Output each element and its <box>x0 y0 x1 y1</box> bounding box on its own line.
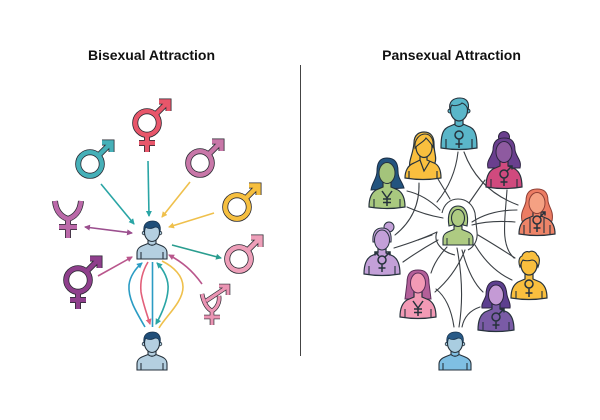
person: centre green figure <box>443 206 473 245</box>
icon: teal male symbol <box>78 142 112 176</box>
person: lilac figure <box>364 222 400 276</box>
icon: purple transgender symbol <box>66 258 100 309</box>
person: green figure with dark blue hair <box>369 158 405 208</box>
panel: pansexual attraction diagram <box>364 98 555 370</box>
centre figure halo <box>436 199 477 255</box>
person: bottom figure <box>137 332 167 370</box>
person: teal top figure <box>441 98 477 150</box>
person: magenta figure with purple hair <box>486 132 522 188</box>
person: pink figure with long hair <box>400 270 436 318</box>
person: yellow curly-haired figure <box>511 251 547 300</box>
icon: pink male symbol <box>227 238 260 271</box>
icon: mauve male symbol <box>188 142 222 175</box>
connection lines <box>394 152 518 327</box>
arrows: symbols to person <box>85 161 221 284</box>
person: coral figure <box>519 189 555 236</box>
person: yellow long-haired figure <box>405 132 441 180</box>
divider between panels <box>300 65 302 356</box>
icon: pink forked arrow symbol <box>202 286 228 325</box>
icon: yellow male symbol <box>225 186 258 219</box>
title: Pansexual Attraction: Pansexual Attraction <box>382 47 521 63</box>
panel: bisexual attraction diagram <box>55 102 260 370</box>
arrows: between the two people <box>129 261 183 328</box>
icon: red transgender symbol <box>135 102 168 152</box>
person: purple figure <box>478 281 514 332</box>
title: Bisexual Attraction: Bisexual Attraction <box>88 47 215 63</box>
person: centre figure <box>137 221 167 259</box>
person: blue bottom figure <box>439 332 471 370</box>
icon: orchid forked symbol <box>55 201 81 238</box>
